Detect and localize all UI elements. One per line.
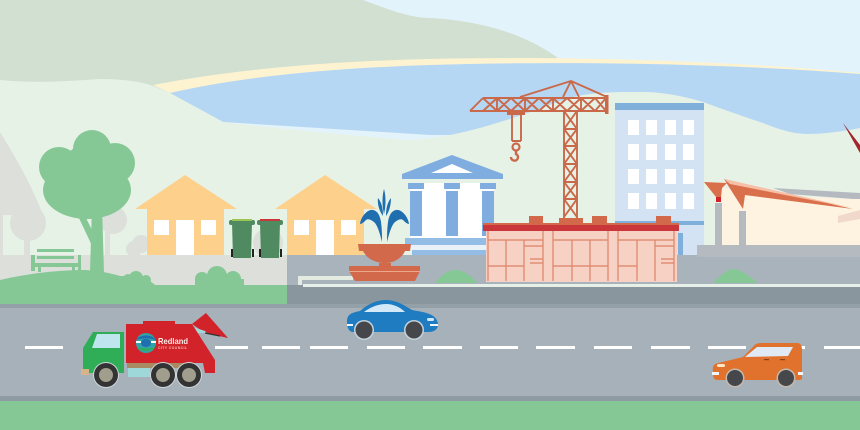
museum — [402, 155, 503, 255]
truck hopper — [192, 313, 228, 338]
museum steps — [405, 238, 490, 245]
sail structure tip — [843, 123, 860, 153]
bay water — [170, 63, 860, 135]
plaza shrub — [435, 270, 477, 283]
park tree — [39, 130, 135, 273]
museum pediment — [402, 155, 503, 179]
background grey trees — [0, 132, 283, 258]
white kerb line — [303, 284, 860, 287]
museum columns — [408, 183, 496, 236]
stadium columns — [715, 203, 746, 245]
office building — [615, 103, 704, 255]
fountain bowl — [358, 244, 411, 263]
truck chassis — [127, 362, 183, 368]
truck wheels — [93, 362, 119, 388]
road bottom edge — [0, 396, 860, 401]
fountain basin — [349, 266, 420, 281]
stadium base — [697, 245, 860, 257]
grey footpath ground — [0, 255, 287, 287]
red-lid wheelie bin — [257, 219, 283, 258]
truck body — [126, 321, 215, 373]
green wheelie bin — [229, 219, 255, 258]
sandy shoreline — [153, 58, 860, 93]
bottom grass — [0, 401, 860, 430]
kerb shadow strip — [287, 285, 860, 305]
second plaza shrub — [713, 269, 757, 283]
shop roof — [483, 223, 679, 225]
truck cab — [83, 332, 124, 373]
orange car — [712, 343, 803, 388]
blue car — [347, 300, 438, 340]
mid ground paved plaza — [287, 255, 860, 285]
shop roof blocks — [529, 216, 671, 224]
council logo — [136, 333, 156, 353]
shop front — [483, 216, 679, 282]
council name: Redland — [158, 336, 188, 346]
left grass verge — [0, 266, 287, 304]
stadium roof — [704, 182, 727, 197]
tower crane — [470, 81, 608, 218]
stadium back roof — [773, 188, 860, 199]
green land — [0, 79, 860, 300]
garbage truck — [81, 313, 228, 388]
road top edge — [0, 304, 860, 308]
fountain water spray — [360, 189, 409, 242]
stadium — [697, 179, 860, 257]
garbage truck: CITY COUNCIL — [158, 346, 188, 350]
road surface — [0, 304, 860, 401]
distant hill — [0, 0, 558, 110]
stadium peach panel — [838, 210, 860, 223]
house one — [135, 175, 237, 255]
fountain — [349, 189, 420, 281]
shop window frames — [488, 231, 674, 281]
lane dashes — [25, 346, 860, 349]
house two — [275, 175, 377, 255]
stadium wall — [722, 187, 860, 245]
plaza steps — [300, 278, 353, 285]
park bench — [31, 249, 81, 272]
red marker — [716, 196, 721, 202]
